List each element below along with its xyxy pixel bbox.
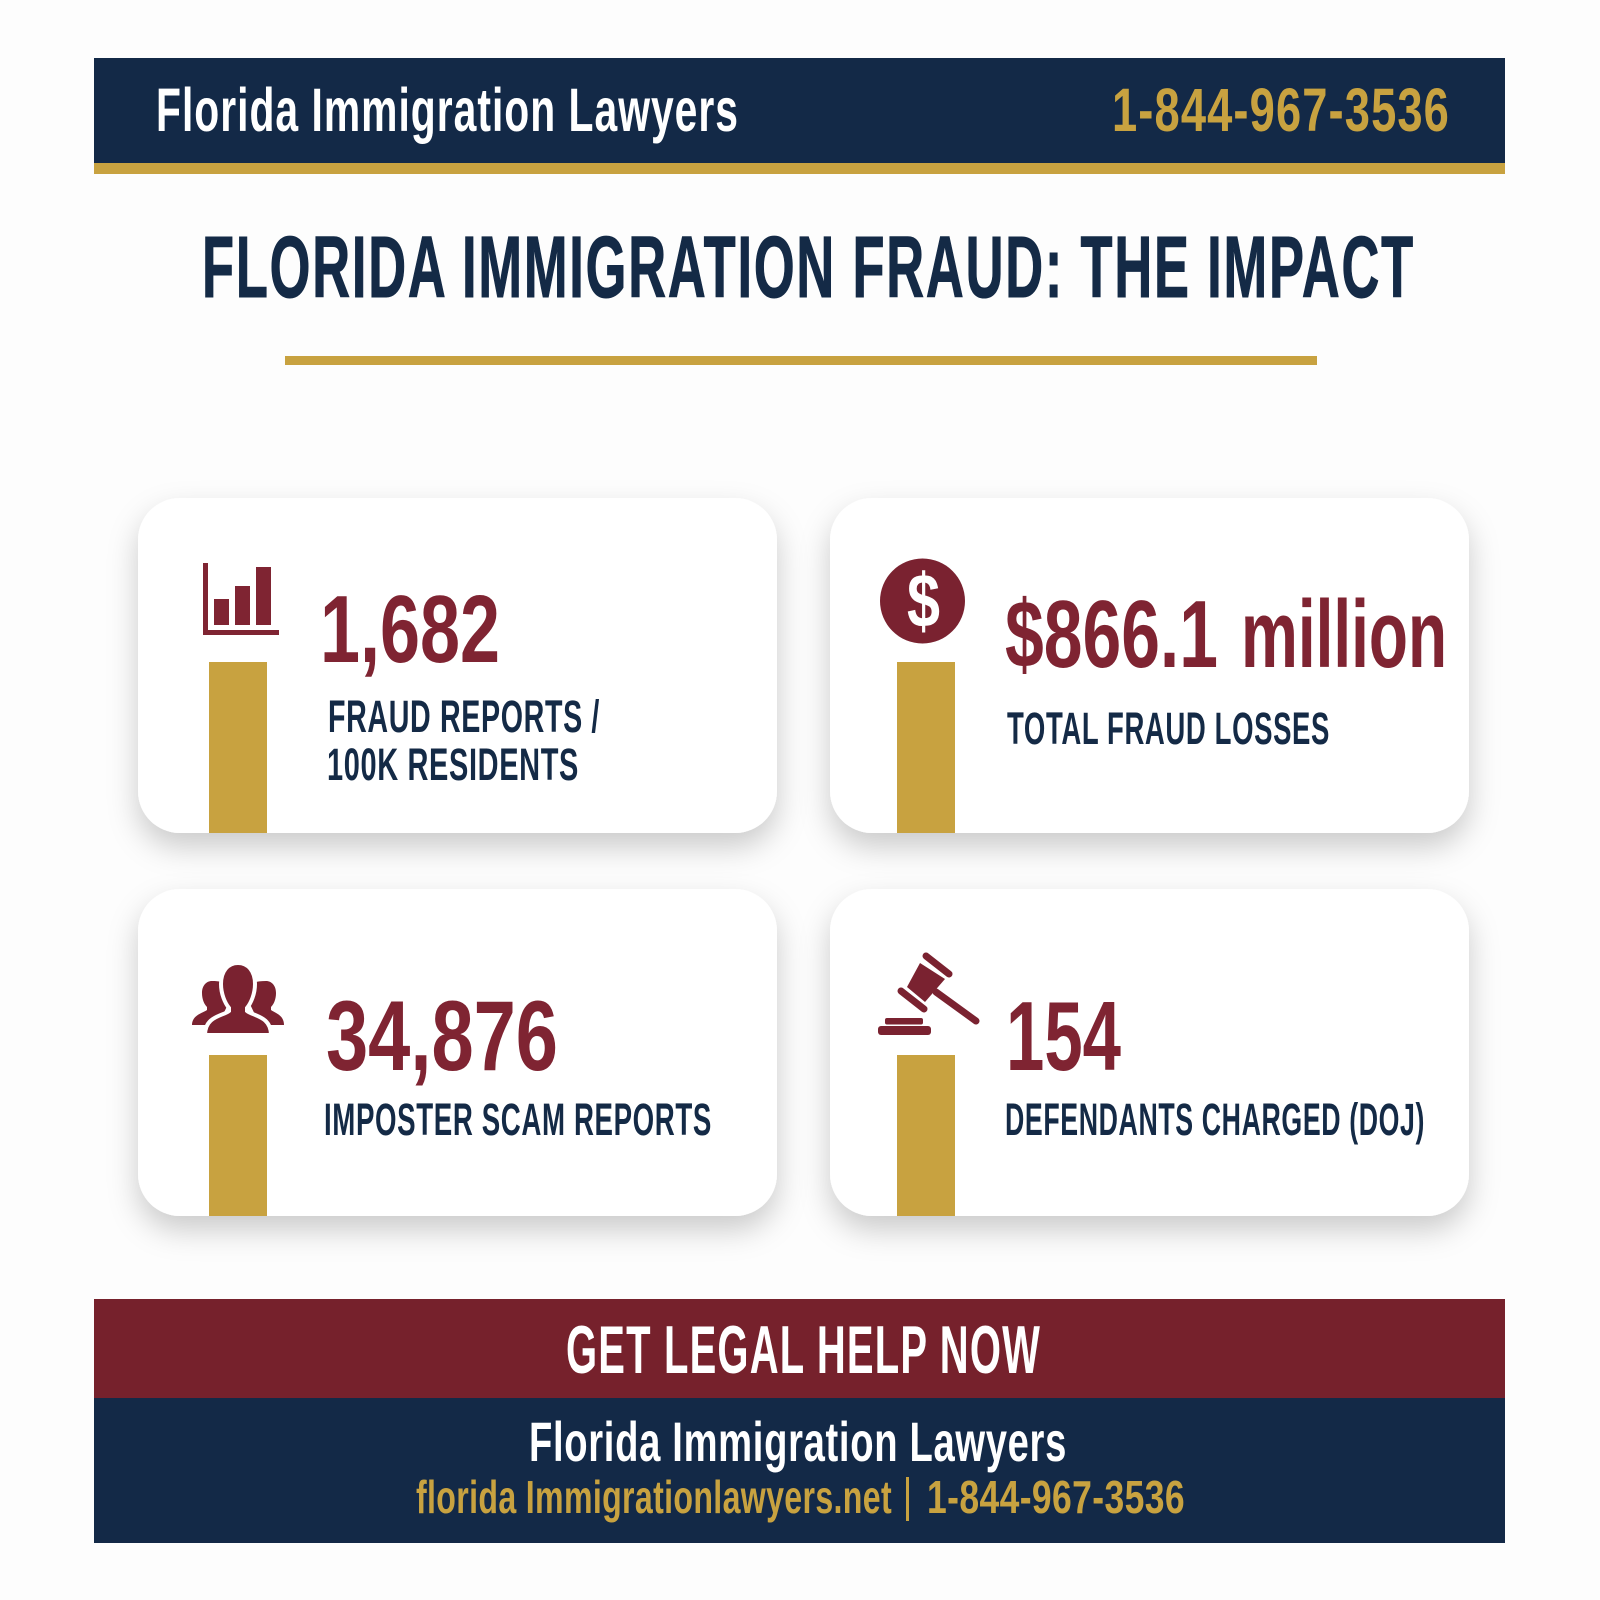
gold bar	[209, 1055, 267, 1216]
stat value	[1005, 581, 1447, 688]
stat value: 34,876	[326, 980, 558, 1091]
stat label: 100K RESIDENTS	[327, 739, 579, 790]
header firm name: Florida Immigration Lawyers	[156, 76, 739, 144]
stat value: $866.1	[1005, 581, 1218, 688]
title underline	[285, 356, 1317, 365]
footer phone number: 1-844-967-3536	[927, 1471, 1185, 1523]
stat value: million	[1241, 581, 1447, 688]
panel: defendants charged	[830, 889, 1469, 1216]
panel: imposter scam reports	[138, 889, 777, 1216]
stat label: TOTAL FRAUD LOSSES	[1007, 703, 1330, 754]
panel: total fraud losses	[830, 498, 1469, 833]
stat label: IMPOSTER SCAM REPORTS	[324, 1094, 712, 1145]
gold bar	[897, 1055, 955, 1216]
stat label	[327, 691, 600, 790]
stat label: FRAUD REPORTS /	[328, 691, 600, 742]
footer firm name: Florida Immigration Lawyers	[529, 1410, 1067, 1473]
icon: gavel	[878, 956, 976, 1035]
icon: dollar coin	[880, 558, 965, 644]
footer contact panel	[94, 1398, 1505, 1543]
icon: group of people	[192, 963, 284, 1035]
icon: dollar coin: $	[907, 559, 940, 644]
gold bar	[897, 662, 955, 833]
panel: fraud reports	[138, 498, 777, 833]
icon: bar chart	[203, 563, 279, 635]
call to action banner: GET LEGAL HELP NOW	[566, 1312, 1041, 1388]
footer website: florida Immigrationlawyers.net	[416, 1471, 892, 1523]
stat value: 1,682	[320, 576, 500, 683]
header phone number: 1-844-967-3536	[1112, 76, 1450, 144]
stat value: 154	[1006, 981, 1121, 1091]
header bar	[94, 58, 1505, 174]
call to action banner	[94, 1299, 1505, 1398]
footer divider	[906, 1477, 909, 1521]
gold bar	[209, 662, 267, 833]
